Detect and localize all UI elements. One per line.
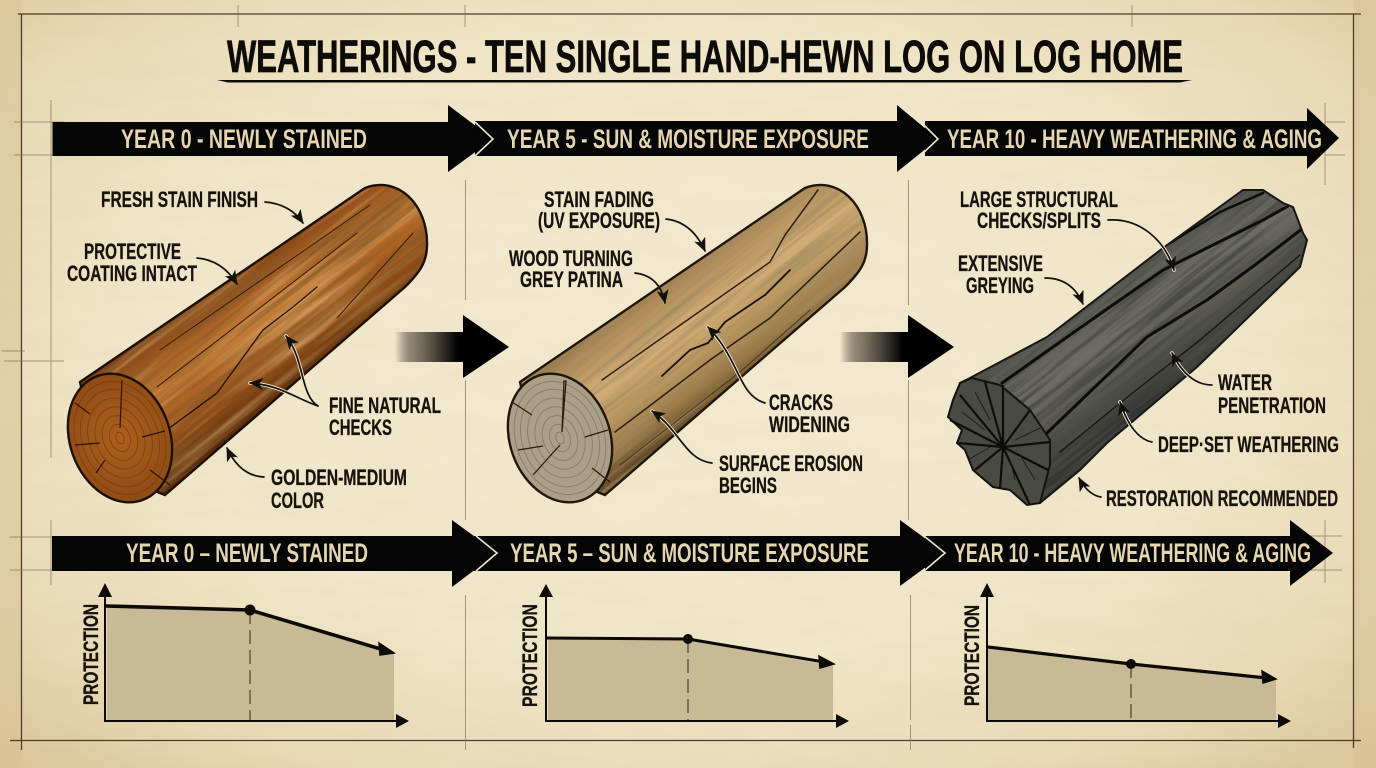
log illustration: fresh stained bbox=[66, 184, 428, 504]
label: protective coating intact: COATING INTACT bbox=[67, 261, 197, 286]
label: wood turning grey patina: GREY PATINA bbox=[520, 267, 623, 292]
label: fine natural checks: CHECKS bbox=[329, 415, 392, 440]
banner arrow: year 5: YEAR 5 - SUN & MOISTURE EXPOSURE bbox=[507, 124, 869, 154]
transition arrow: year 0 to year 5 bbox=[395, 315, 509, 378]
label: protective coating intact bbox=[67, 239, 237, 286]
top timeline banner bbox=[52, 105, 1339, 172]
chart: protection year 10 bbox=[961, 583, 1291, 728]
label: fine natural checks bbox=[250, 336, 441, 440]
chart: protection year 5: PROTECTION bbox=[519, 604, 542, 707]
label: wood turning grey patina bbox=[509, 246, 665, 303]
banner arrow: year 0 bbox=[52, 520, 497, 587]
label: surface erosion begins: BEGINS bbox=[719, 473, 777, 498]
chart: protection year 0 bbox=[80, 583, 409, 728]
label: surface erosion begins bbox=[652, 411, 863, 498]
label: stain fading uv exposure: (UV EXPOSURE) bbox=[538, 208, 660, 233]
label: fresh stain finish bbox=[101, 187, 303, 223]
banner arrow: year 5 bbox=[470, 520, 945, 586]
banner arrow: year 10 bbox=[925, 108, 1339, 169]
banner arrow: year 5 bbox=[475, 105, 938, 172]
panel: year 5 log bbox=[506, 184, 868, 504]
chart: protection year 5 bbox=[519, 584, 849, 728]
label: large structural checks/splits bbox=[960, 187, 1174, 270]
log illustration: sun and moisture exposure bbox=[506, 184, 868, 504]
label: large structural checks/splits: LARGE STRUCTURAL bbox=[960, 187, 1118, 212]
chart: protection year 10: PROTECTION bbox=[961, 605, 984, 706]
panel: year 0 log bbox=[66, 184, 441, 508]
log illustration: heavy weathering bbox=[946, 189, 1308, 506]
label: surface erosion begins: SURFACE EROSION bbox=[719, 451, 863, 476]
label: golden-medium color: COLOR bbox=[271, 488, 324, 513]
label: restoration recommended bbox=[1079, 478, 1338, 511]
transition arrow: year 5 to year 10 bbox=[840, 315, 954, 378]
banner arrow: year 0: YEAR 0 – NEWLY STAINED bbox=[126, 538, 368, 568]
label: cracks widening bbox=[708, 327, 850, 437]
label: stain fading uv exposure bbox=[538, 187, 705, 251]
label: cracks widening: CRACKS bbox=[769, 390, 833, 415]
label: cracks widening: WIDENING bbox=[769, 412, 850, 437]
label: water penetration: PENETRATION bbox=[1218, 393, 1326, 418]
label: water penetration bbox=[1172, 353, 1326, 418]
label: protective coating intact: PROTECTIVE bbox=[84, 239, 181, 264]
label: stain fading uv exposure: STAIN FADING bbox=[544, 187, 654, 212]
banner arrow: year 0 bbox=[52, 105, 493, 172]
label: wood turning grey patina: WOOD TURNING bbox=[509, 246, 633, 271]
label: fresh stain finish: FRESH STAIN FINISH bbox=[101, 187, 258, 212]
banner arrow: year 0: YEAR 0 - NEWLY STAINED bbox=[121, 124, 367, 154]
banner arrow: year 5: YEAR 5 – SUN & MOISTURE EXPOSURE bbox=[510, 538, 869, 568]
label: water penetration: WATER bbox=[1218, 370, 1272, 395]
chart: protection year 0: PROTECTION bbox=[80, 604, 103, 705]
lower timeline banner bbox=[52, 520, 1333, 587]
panel: year 10 log bbox=[946, 189, 1338, 506]
label: extensive greying bbox=[958, 251, 1083, 304]
label: fine natural checks: FINE NATURAL bbox=[329, 393, 441, 418]
label: extensive greying: GREYING bbox=[966, 273, 1034, 298]
banner arrow: year 10 bbox=[925, 520, 1333, 586]
label: extensive greying: EXTENSIVE bbox=[958, 251, 1043, 276]
label: large structural checks/splits: CHECKS/SPLITS bbox=[977, 208, 1101, 233]
label: golden-medium color: GOLDEN-MEDIUM bbox=[271, 465, 407, 490]
label: deep-set weathering bbox=[1120, 402, 1339, 457]
label: golden-medium color bbox=[227, 448, 407, 513]
